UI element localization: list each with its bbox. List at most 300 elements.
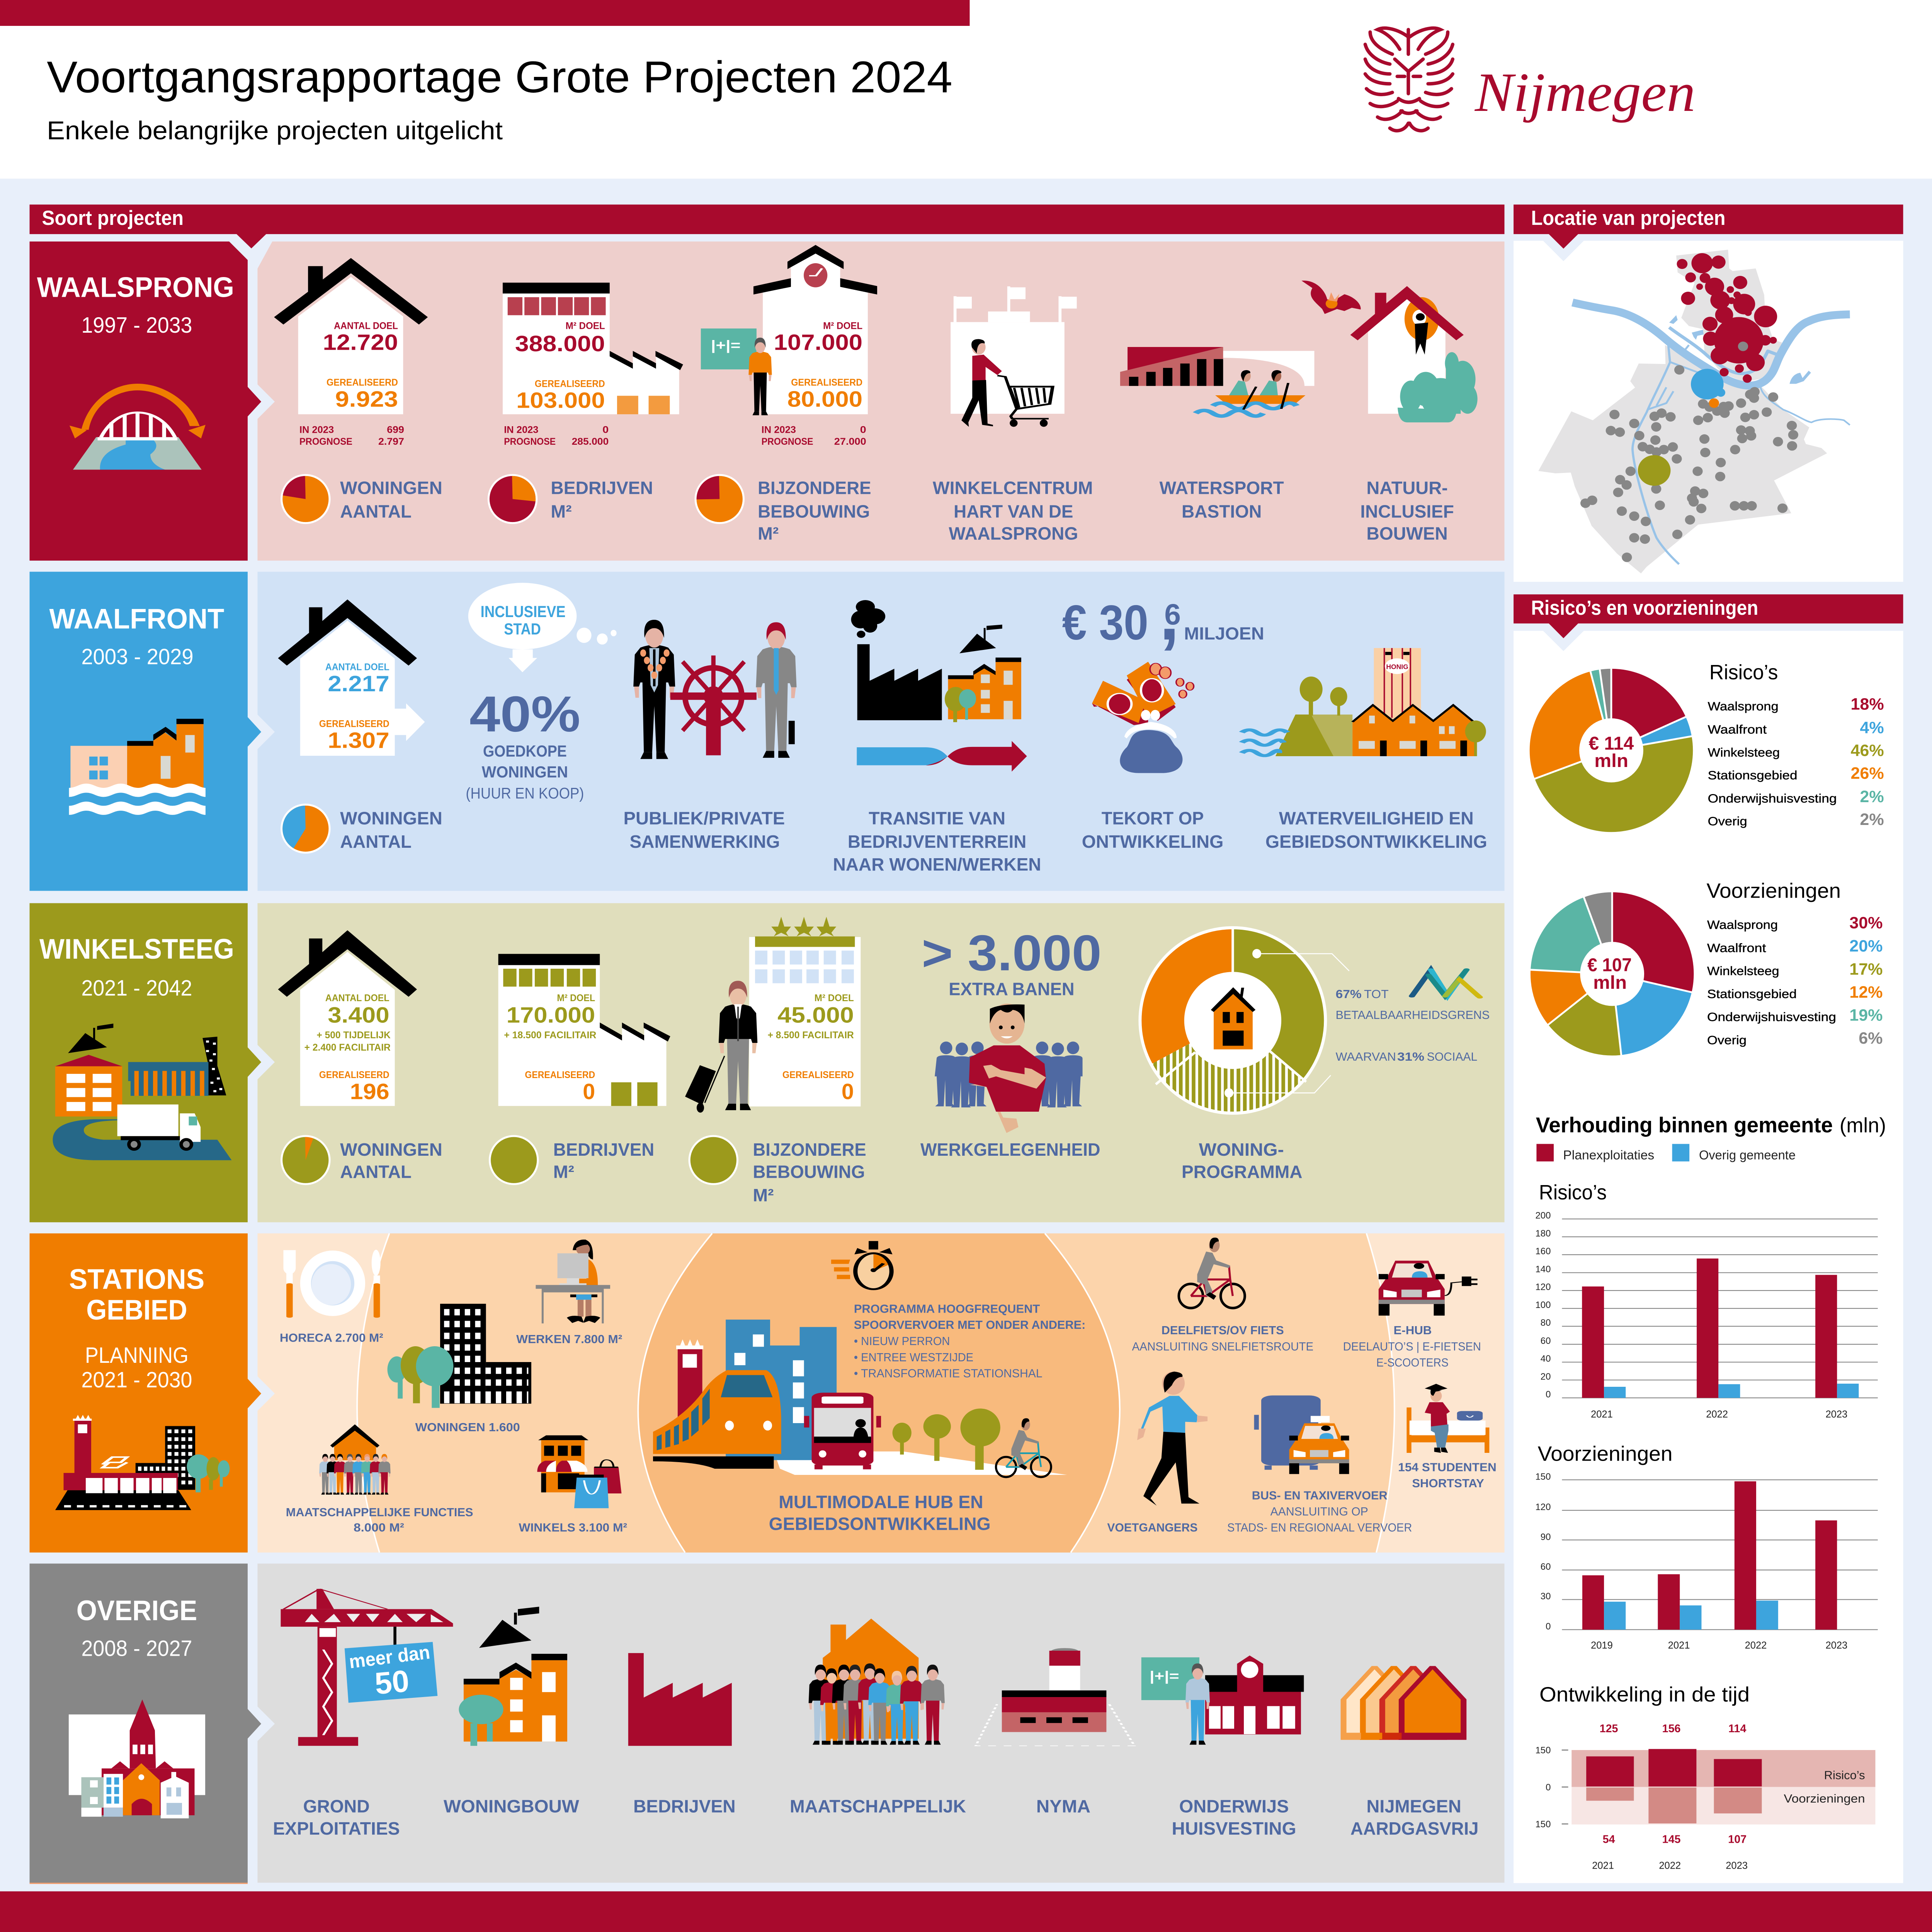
business stat: Waalsprong bedrijven: IN 2023 — [504, 425, 538, 435]
bar chart: risico's: 0 — [1546, 1389, 1551, 1400]
legend: voorzieningen: Waalfront — [1707, 941, 1766, 955]
project: tekort op ontwikkeling — [1062, 575, 1264, 852]
bar chart: voorzieningen: 90 — [1541, 1532, 1551, 1542]
bar chart: risico's: 80 — [1541, 1318, 1551, 1328]
icon: buildings on water — [69, 719, 206, 815]
legend: risico's: Stationsgebied — [1708, 768, 1797, 782]
bar chart: voorzieningen: 2023 — [1826, 1640, 1847, 1651]
panel: Waalfront — [30, 572, 1504, 891]
icon: train — [653, 1370, 781, 1469]
bar chart: risico's: 100 — [1536, 1300, 1551, 1310]
chart: ontwikkeling in de tijd: 2021 — [1592, 1861, 1614, 1871]
project: natuurinclusief: BOUWEN — [1366, 524, 1448, 544]
project: grondexploitaties — [273, 1589, 453, 1838]
project: woningprogramma: WAARVAN — [1336, 1051, 1396, 1063]
bar chart: voorzieningen: 120 — [1536, 1502, 1551, 1512]
project: natuurinclusief: NATUUR- — [1366, 478, 1448, 498]
chart legend — [1536, 1144, 1796, 1163]
category tab: Stationsgebied: PLANNING — [85, 1343, 189, 1368]
project: waterveiligheid: HONIG — [1386, 663, 1408, 671]
item: studenten shortstay: SHORTSTAY — [1412, 1477, 1484, 1490]
icon: school with teacher: |+|= — [1150, 1668, 1179, 1684]
hub illustration: train, tower, bus, trees: PROGRAMMA HOOGFREQUENT — [854, 1303, 1040, 1316]
chart: ontwikkeling in de tijd: 156 — [1662, 1723, 1681, 1735]
icon: purse with euro notes — [1092, 662, 1194, 773]
legend: voorzieningen: Overig — [1707, 1033, 1747, 1047]
special buildings stat: Waalsprong bijzondere bebouwing — [695, 245, 877, 544]
business stat: Winkelsteeg bedrijven: 0 — [583, 1079, 595, 1104]
bar chart: voorzieningen — [1536, 1442, 1878, 1651]
category tab: Waalsprong — [30, 242, 261, 561]
project: winkelcentrum — [933, 286, 1093, 544]
business stat: Waalsprong bedrijven: 103.000 — [516, 388, 605, 413]
business stat: Waalsprong bedrijven: PROGNOSE — [504, 437, 556, 447]
bar chart: risico's: 2021 — [1591, 1409, 1613, 1420]
pie: winkelsteeg bedrijven realised — [489, 1135, 539, 1185]
housing stat: Waalfront woningen: WONINGEN — [340, 808, 442, 828]
special buildings stat: Waalsprong bijzondere bebouwing: IN 2023 — [762, 425, 796, 435]
housing stat: Waalfront woningen: 2.217 — [328, 672, 389, 696]
icon: person at desk — [536, 1240, 610, 1323]
logo wordmark: Nijmegen — [1474, 62, 1696, 123]
housing stat: Waalsprong woningen: 9.923 — [335, 387, 398, 412]
chart: ontwikkeling in de tijd: 150 — [1536, 1819, 1551, 1830]
legend: voorzieningen: 17% — [1849, 960, 1883, 978]
business stat: Winkelsteeg bedrijven: 170.000 — [507, 1003, 595, 1028]
bar chart: risico's: 2023 — [1826, 1409, 1847, 1420]
item: horeca — [280, 1250, 383, 1345]
item: maatschappelijke functies — [286, 1424, 473, 1534]
item: voetgangers: VOETGANGERS — [1107, 1522, 1197, 1534]
business stat: Waalsprong bedrijven — [488, 283, 683, 524]
item: winkels — [519, 1435, 627, 1534]
title: Voortgangsrapportage Grote Projecten 2024 — [47, 53, 952, 102]
icon: station building — [55, 1415, 230, 1510]
project: tekort op ontwikkeling: TEKORT OP — [1102, 808, 1204, 828]
chart: ontwikkeling in de tijd: 107 — [1728, 1833, 1747, 1845]
heading bar: Soort projecten: Soort projecten — [42, 207, 184, 230]
category tab: Winkelsteeg — [30, 903, 261, 1222]
chart: ontwikkeling in de tijd: 114 — [1728, 1723, 1746, 1735]
project: woningprogramma: PROGRAMMA — [1182, 1162, 1303, 1182]
legend: risico's: 4% — [1860, 718, 1884, 737]
project: winkelcentrum: HART VAN DE — [954, 501, 1073, 521]
legend: risico's: Onderwijshuisvesting — [1708, 791, 1837, 805]
chart: ontwikkeling in de tijd: 145 — [1662, 1833, 1681, 1845]
business stat: Winkelsteeg bedrijven: M² DOEL — [557, 993, 595, 1003]
hub illustration: train, tower, bus, trees: • ENTREE WESTZIJDE — [854, 1351, 973, 1364]
stat: 40% goedkope woningen: GOEDKOPE — [483, 742, 567, 760]
chart: ontwikkeling in de tijd: 125 — [1600, 1723, 1618, 1735]
icon: traveller with suitcase — [685, 981, 757, 1112]
project: publiek/private samenwerking: PUBLIEK/PRIVATE — [624, 808, 785, 828]
project: waterveiligheid: GEBIEDSONTWIKKELING — [1265, 832, 1487, 852]
project: aardgasvrij — [1342, 1666, 1479, 1838]
housing stat: Winkelsteeg woningen: AANTAL DOEL — [325, 993, 389, 1003]
project: grondexploitaties: 50 — [373, 1663, 410, 1701]
bar chart: voorzieningen: Voorzieningen — [1538, 1442, 1672, 1465]
chart: ontwikkeling in de tijd: Voorzieningen — [1784, 1793, 1865, 1805]
heading bar: Soort projecten — [30, 204, 1504, 248]
icon: plate and cutlery — [283, 1250, 381, 1318]
heading: Risico's en voorzieningen: Risico’s en voorzieningen — [1531, 597, 1758, 619]
icon: shop and shopping bags — [537, 1435, 621, 1508]
icon: bus and taxi — [1254, 1395, 1349, 1474]
legend: risico's — [1708, 661, 1884, 829]
project: woningbouw — [444, 1607, 579, 1816]
legend: voorzieningen: 19% — [1849, 1006, 1883, 1025]
donut chart: risico's: € 114 — [1589, 733, 1634, 754]
logo: Nijmegen lion — [1365, 28, 1453, 131]
subtitle: Enkele belangrijke projecten uitgelicht — [47, 116, 503, 145]
legend: risico's: 46% — [1850, 741, 1884, 760]
item: deelfiets — [1132, 1238, 1313, 1353]
panel: Stationsgebied — [30, 1233, 1504, 1553]
page header — [0, 0, 1932, 179]
project: bedrijven: BEDRIJVEN — [633, 1796, 736, 1816]
hotel stat: Winkelsteeg bijzondere bebouwing: M² DOEL — [815, 993, 854, 1003]
icon: crane with sign — [281, 1589, 453, 1746]
business stat: Winkelsteeg bedrijven: + 18.500 FACILITAIR — [504, 1030, 597, 1041]
hotel stat: Winkelsteeg bijzondere bebouwing: M² — [753, 1185, 774, 1205]
item: werken — [516, 1240, 622, 1346]
housing stat: Winkelsteeg woningen: 196 — [350, 1079, 389, 1104]
donut chart: woningprogramma — [1138, 926, 1327, 1115]
category tab: Waalsprong: 1997 - 2033 — [81, 313, 192, 338]
project: aardgasvrij: NIJMEGEN — [1366, 1796, 1461, 1816]
stat: 40% goedkope woningen: WONINGEN — [482, 763, 568, 781]
icon: student on bed — [1406, 1384, 1489, 1453]
project: onderwijshuisvesting: ONDERWIJS — [1179, 1796, 1289, 1816]
item: studenten shortstay — [1398, 1384, 1497, 1490]
housing stat: Waalsprong woningen: PROGNOSE — [299, 437, 352, 447]
project dots: Overige — [1580, 342, 1798, 562]
hub illustration: train, tower, bus, trees: GEBIEDSONTWIKKELING — [769, 1514, 991, 1534]
icon: house and crowd — [809, 1619, 945, 1745]
chart: ontwikkeling in de tijd — [1536, 1683, 1875, 1871]
legend: voorzieningen: Stationsgebied — [1707, 987, 1797, 1001]
project: woningprogramma: BETAALBAARHEIDSGRENS — [1336, 1009, 1490, 1022]
item: horeca: HORECA 2.700 M² — [280, 1332, 383, 1345]
bar chart: risico's: 40 — [1541, 1354, 1551, 1364]
project: onderwijshuisvesting — [1141, 1655, 1304, 1838]
item: voetgangers — [1107, 1372, 1208, 1534]
icon: teacher at board: |+|= — [711, 338, 740, 353]
chart legend: Planexploitaties — [1563, 1148, 1654, 1163]
legend: risico's: Risico’s — [1709, 661, 1778, 684]
project: waterveiligheid — [1242, 648, 1487, 852]
bar chart: risico's: 180 — [1536, 1228, 1551, 1239]
heading: Locatie van projecten — [1514, 204, 1903, 248]
heading: verhouding binnen gemeente: Verhouding binnen gemeente — [1536, 1112, 1833, 1137]
icon: rowers at bastion — [1120, 347, 1314, 416]
project: winkelcentrum: WINKELCENTRUM — [933, 478, 1093, 498]
chart: ontwikkeling in de tijd: Risico’s — [1824, 1769, 1865, 1782]
project: werkgelegenheid: WERKGELEGENHEID — [920, 1139, 1100, 1160]
panel: Winkelsteeg — [30, 903, 1504, 1222]
donut chart: voorzieningen — [1529, 889, 1696, 1057]
project dot: Winkelsteeg — [1638, 455, 1670, 486]
item: bus en taxi: BUS- EN TAXIVERVOER — [1252, 1490, 1388, 1502]
item: bus en taxi: AANSLUITING OP — [1270, 1505, 1368, 1518]
item: maatschappelijke functies: 8.000 M² — [354, 1522, 404, 1534]
housing stat: Waalfront woningen: AANTAL DOEL — [325, 662, 389, 673]
panel: Overige — [30, 1564, 1504, 1884]
item: werken: WERKEN 7.800 M² — [516, 1333, 622, 1346]
bar chart: voorzieningen: 150 — [1536, 1472, 1551, 1482]
project: werkgelegenheid: EXTRA BANEN — [949, 979, 1075, 999]
icon: hotel — [749, 917, 861, 1107]
special buildings stat: Waalsprong bijzondere bebouwing: BIJZONDERE — [758, 478, 871, 498]
project dots: Waalfront — [1691, 369, 1725, 400]
project: watersport: BASTION — [1182, 501, 1262, 521]
project: NYMA: NYMA — [1036, 1796, 1090, 1816]
chart: ontwikkeling in de tijd: 0 — [1546, 1782, 1551, 1793]
legend: risico's: Winkelsteeg — [1708, 745, 1780, 759]
housing stat: Winkelsteeg woningen: + 500 TIJDELIJK — [317, 1030, 391, 1041]
item: e-hub: DEELAUTO’S | E-FIETSEN — [1343, 1340, 1481, 1353]
legend: risico's: Waalsprong — [1708, 699, 1779, 713]
project: NYMA — [976, 1648, 1134, 1816]
housing stat: Waalfront woningen — [278, 599, 442, 854]
business stat: Winkelsteeg bedrijven: GEREALISEERD — [525, 1070, 595, 1080]
panel: Waalsprong — [30, 242, 1504, 561]
icon: town, shop, truck and road — [53, 1024, 231, 1160]
housing stat: Waalfront woningen: AANTAL — [340, 832, 412, 852]
bar chart: voorzieningen: 2021 — [1668, 1640, 1690, 1651]
heading: Locatie van projecten: Locatie van projecten — [1531, 207, 1726, 230]
stat: 30,6 miljoen: MILJOEN — [1184, 624, 1264, 643]
project: werkgelegenheid: > 3.000 — [922, 925, 1102, 981]
housing stat: Winkelsteeg woningen — [278, 930, 442, 1185]
category tab: Stationsgebied: GEBIED — [86, 1294, 187, 1326]
project: transitie bedrijventerrein — [833, 600, 1041, 874]
icon: mayor and businessman at ship's wheel — [633, 620, 797, 759]
category tab: Stationsgebied: 2021 - 2030 — [81, 1368, 192, 1393]
bar chart: risico's: 60 — [1541, 1336, 1551, 1346]
hotel stat: Winkelsteeg bijzondere bebouwing: GEREALISEERD — [782, 1070, 854, 1080]
project: woningbouw: WONINGBOUW — [444, 1796, 579, 1816]
project: onderwijshuisvesting: HUISVESTING — [1172, 1818, 1296, 1838]
pie: bedrijven realised — [488, 474, 537, 524]
heading: Risico's en voorzieningen — [1514, 594, 1903, 638]
icon: walking man — [1137, 1372, 1208, 1506]
project: tekort op ontwikkeling: ONTWIKKELING — [1082, 832, 1223, 852]
item: e-hub: E-SCOOTERS — [1376, 1356, 1449, 1369]
category tab: Waalfront: 2003 - 2029 — [81, 645, 194, 669]
icon: stopwatch — [831, 1241, 893, 1289]
housing stat: Waalsprong woningen: AANTAL DOEL — [334, 321, 398, 331]
hub buildings — [676, 1320, 1067, 1475]
bar chart: risico's: 160 — [1536, 1246, 1551, 1257]
legend: voorzieningen: 12% — [1849, 983, 1883, 1002]
business stat: Winkelsteeg bedrijven: M² — [553, 1162, 574, 1182]
category tab: Stationsgebied: STATIONS — [69, 1263, 204, 1295]
bar chart: risico's: Risico’s — [1539, 1181, 1607, 1204]
special buildings stat: Waalsprong bijzondere bebouwing: 107.000 — [774, 330, 862, 355]
thought bubble: inclusieve stad: STAD — [504, 620, 541, 638]
bar chart: risico's: 120 — [1536, 1282, 1551, 1293]
project: winkelcentrum: WAALSPRONG — [949, 524, 1078, 544]
housing stat: Winkelsteeg woningen: GEREALISEERD — [319, 1070, 389, 1080]
icon: small house — [1211, 987, 1255, 1049]
project: woningprogramma: SOCIAAL — [1427, 1051, 1477, 1063]
project: waterveiligheid: WATERVEILIGHEID EN — [1279, 808, 1474, 828]
icon: bus — [804, 1393, 1000, 1470]
special buildings stat: Waalsprong bijzondere bebouwing: PROGNOSE — [762, 437, 813, 447]
housing stat: Winkelsteeg woningen: AANTAL — [340, 1162, 412, 1182]
special buildings stat: Waalsprong bijzondere bebouwing: M² DOEL — [823, 321, 862, 331]
legend: risico's: Overig — [1708, 814, 1747, 828]
business stat: Winkelsteeg bedrijven — [489, 954, 670, 1185]
category tab: Winkelsteeg: 2021 - 2042 — [81, 976, 192, 1001]
pie: woningen realised — [281, 474, 331, 524]
category tab: Overige: OVERIGE — [77, 1595, 197, 1626]
housing stat: Winkelsteeg woningen: WONINGEN — [340, 1139, 442, 1160]
thought bubble: inclusieve stad: INCLUSIEVE — [481, 602, 566, 621]
bar chart: risico's: 140 — [1536, 1264, 1551, 1275]
bar chart: voorzieningen: 0 — [1546, 1621, 1551, 1632]
donut chart: risico's: mln — [1594, 751, 1628, 771]
icon: school with teacher — [1141, 1655, 1304, 1745]
project: woningprogramma: WONING- — [1199, 1139, 1284, 1160]
project: aardgasvrij: AARDGASVRIJ — [1350, 1818, 1479, 1838]
item: e-hub — [1343, 1261, 1481, 1369]
housing stat: Waalsprong woningen: IN 2023 — [299, 425, 334, 435]
icon: bridge with leap arc — [70, 384, 206, 470]
stat: 40% goedkope woningen: 40% — [469, 686, 580, 742]
item: maatschappelijke functies: MAATSCHAPPELIJKE FUNCTIES — [286, 1506, 473, 1519]
item: winkels: WINKELS 3.100 M² — [519, 1522, 627, 1534]
special buildings stat: Waalsprong bijzondere bebouwing: 27.000 — [834, 437, 866, 447]
project: natuurinclusief: INCLUSIEF — [1360, 501, 1454, 521]
housing stat: Waalsprong woningen — [274, 258, 442, 524]
hotel stat: Winkelsteeg bijzondere bebouwing: + 8.500 FACILITAIR — [768, 1030, 854, 1041]
project: publiek/private samenwerking: SAMENWERKING — [629, 832, 780, 852]
hotel stat: Winkelsteeg bijzondere bebouwing: 0 — [842, 1079, 854, 1104]
pie: bijzondere bebouwing realised — [695, 474, 745, 524]
category tab: Winkelsteeg: WINKELSTEEG — [39, 933, 234, 965]
project dots: Waalsprong — [1677, 253, 1777, 383]
housing stat: Waalsprong woningen: GEREALISEERD — [327, 378, 398, 388]
panel: Locatie van projecten — [1514, 204, 1903, 582]
icon: red factory — [628, 1653, 732, 1746]
icon: electric car with plug — [1379, 1261, 1478, 1316]
hub illustration: train, tower, bus, trees — [653, 1241, 1085, 1534]
category tab: Overige: 2008 - 2027 — [81, 1636, 192, 1661]
icon: cyclist small — [996, 1418, 1051, 1477]
hotel stat: Winkelsteeg bijzondere bebouwing: BIJZONDERE — [753, 1139, 866, 1160]
housing stat: Winkelsteeg woningen: 3.400 — [328, 1003, 389, 1028]
item: studenten shortstay: 154 STUDENTEN — [1398, 1461, 1497, 1474]
bar chart: risico's: 20 — [1541, 1371, 1551, 1382]
stat: 40% goedkope woningen: (HUUR EN KOOP) — [466, 785, 584, 802]
footer bar — [0, 1891, 1932, 1932]
icon: worker with crowd — [935, 1003, 1083, 1133]
housing stat: Waalsprong woningen: WONINGEN — [340, 478, 442, 498]
housing stat: Waalsprong woningen: 12.720 — [323, 330, 398, 355]
icon: NYMA factory — [976, 1648, 1134, 1746]
icon: shopper with trolley — [951, 286, 1077, 427]
stat: 30,6 miljoen: € 30 — [1062, 595, 1148, 650]
project: transitie bedrijventerrein: TRANSITIE VAN — [869, 808, 1005, 828]
business stat: Waalsprong bedrijven: M² — [551, 501, 572, 521]
category tab: Waalfront: WAALFRONT — [49, 603, 224, 634]
housing stat: Waalsprong woningen: AANTAL — [340, 501, 412, 521]
donut chart: risico's — [1532, 665, 1696, 807]
legend: risico's: 2% — [1860, 810, 1884, 829]
pie: waalfront woningen realised — [281, 804, 331, 854]
project: natuurinclusief — [1301, 281, 1478, 544]
business stat: Waalsprong bedrijven: BEDRIJVEN — [551, 478, 653, 498]
icon: teacher at board — [701, 328, 772, 415]
legend: voorzieningen: 30% — [1849, 914, 1883, 932]
housing stat: Waalfront woningen: GEREALISEERD — [319, 719, 389, 729]
bar chart: risico's — [1536, 1181, 1878, 1420]
business stat: Waalsprong bedrijven: M² DOEL — [566, 321, 605, 331]
icon: housing block — [459, 1607, 567, 1746]
category tab: Stationsgebied — [30, 1233, 261, 1553]
item: e-hub: E-HUB — [1394, 1324, 1432, 1337]
project: watersport — [1120, 347, 1314, 521]
legend: risico's: Waalfront — [1708, 722, 1767, 736]
hub illustration: train, tower, bus, trees: • TRANSFORMATIE STATIONSHAL — [854, 1367, 1043, 1380]
hub illustration: train, tower, bus, trees: SPOORVERVOER MET ONDER ANDERE: — [854, 1319, 1085, 1332]
icon: house and small crowd — [319, 1424, 391, 1495]
icon: factory to housing transition — [851, 600, 1027, 772]
hotel stat: Winkelsteeg bijzondere bebouwing: 45.000 — [777, 1003, 854, 1028]
housing stat: Waalfront woningen: 1.307 — [328, 728, 389, 753]
map of Nijmegen with project dots — [1538, 250, 1850, 573]
project: maatschappelijk: MAATSCHAPPELIJK — [790, 1796, 966, 1816]
legend: voorzieningen: Onderwijshuisvesting — [1707, 1010, 1836, 1024]
special buildings stat: Waalsprong bijzondere bebouwing: BEBOUWING — [758, 501, 870, 521]
housing stat: Waalsprong woningen: 2.797 — [378, 437, 404, 447]
housing stat: Winkelsteeg woningen: + 2.400 FACILITAIR — [304, 1043, 391, 1053]
hotel stat: Winkelsteeg bijzondere bebouwing — [685, 917, 866, 1205]
business stat: Waalsprong bedrijven: 285.000 — [572, 437, 609, 447]
project dot: Stationsgebied — [1709, 398, 1719, 408]
stat: 30,6 miljoen — [1062, 575, 1264, 655]
bar chart: voorzieningen: 30 — [1541, 1591, 1551, 1602]
map rivers — [1573, 303, 1850, 564]
stat: 30,6 miljoen: 6 — [1164, 599, 1181, 631]
callout lines — [1225, 949, 1349, 1098]
thought bubble: inclusieve stad — [468, 583, 617, 672]
category tab: Waalfront — [30, 572, 261, 891]
icon: house with bat, bird and bush — [1301, 281, 1478, 422]
legend: voorzieningen: Waalsprong — [1707, 918, 1778, 932]
business stat: Winkelsteeg bedrijven: BEDRIJVEN — [553, 1139, 654, 1160]
centre hub area — [638, 1233, 1120, 1553]
category tab: Overige — [30, 1564, 261, 1884]
hub illustration: train, tower, bus, trees: • NIEUW PERRON — [854, 1335, 950, 1348]
icon: overlapping house outlines — [1342, 1666, 1466, 1739]
middle ring — [357, 1233, 1395, 1553]
business stat: Waalsprong bedrijven: 0 — [602, 425, 609, 435]
legend: risico's: 2% — [1860, 787, 1884, 806]
icon: church and town — [69, 1699, 205, 1818]
item: woningen: WONINGEN 1.600 — [415, 1421, 520, 1434]
item: bus en taxi — [1227, 1395, 1412, 1534]
donut chart: voorzieningen: mln — [1593, 973, 1627, 993]
project: woningprogramma: 67% — [1336, 988, 1362, 1001]
project: transitie bedrijventerrein: NAAR WONEN/WERKEN — [833, 854, 1041, 874]
legend: voorzieningen — [1706, 879, 1883, 1048]
project: transitie bedrijventerrein: BEDRIJVENTERREIN — [848, 832, 1026, 852]
icon: apartment blocks with trees — [388, 1304, 531, 1408]
special buildings stat: Waalsprong bijzondere bebouwing: 80.000 — [787, 387, 862, 412]
